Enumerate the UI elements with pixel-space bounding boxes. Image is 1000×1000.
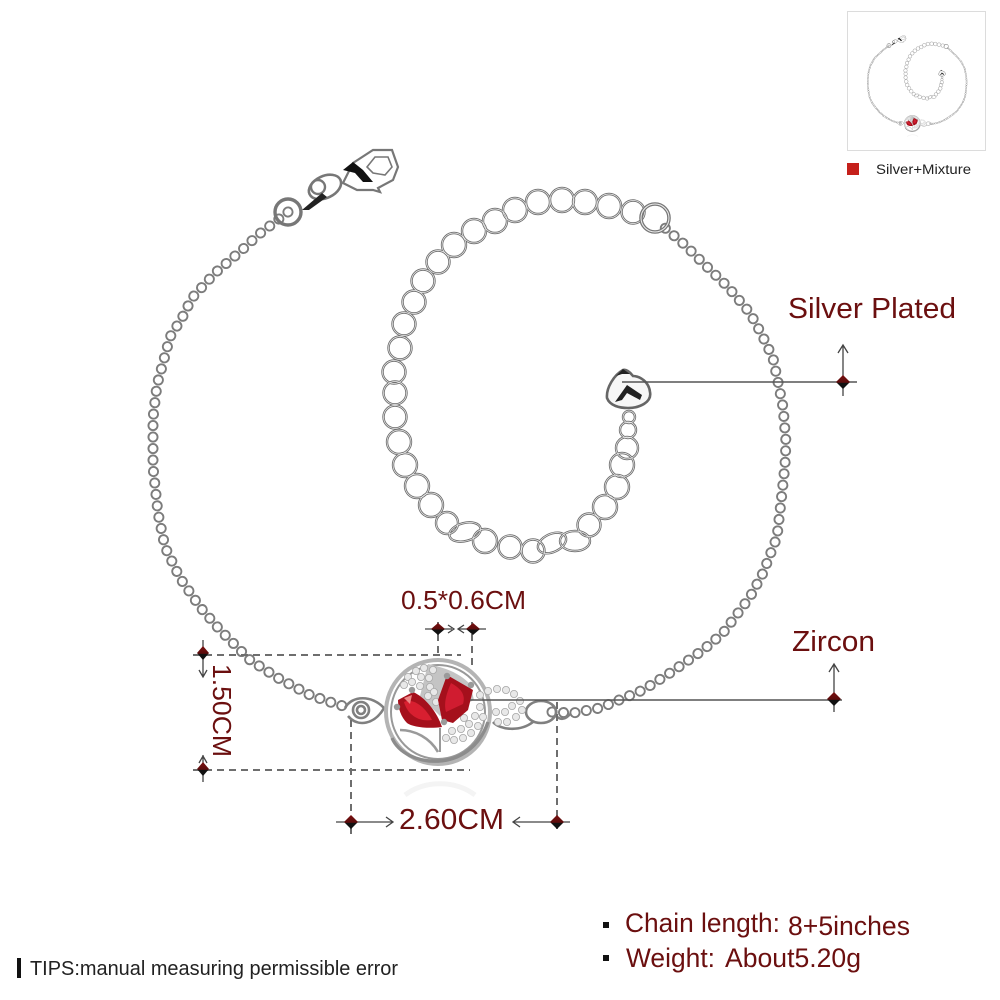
spec: chain length: 8+5inches: [788, 911, 910, 941]
callout: Zircon: [470, 626, 875, 712]
thumbnail panel: [848, 12, 986, 150]
callout: Silver Plated: Silver Plated: [788, 293, 956, 325]
dimension: 0.5*0.6CM: 0.5*0.6CM: [401, 585, 526, 615]
spec: weight: About5.20g: [725, 943, 861, 973]
spec: chain length: [603, 908, 910, 941]
spec: weight: [603, 943, 861, 973]
thumbnail: anklet: [868, 36, 967, 137]
dimension: 2.60CM: [336, 702, 570, 836]
dimension: 1.50CM: [193, 640, 470, 782]
spec: weight: Weight:: [626, 943, 715, 973]
dimension: 2.60CM: 2.60CM: [399, 804, 504, 836]
legend: Silver+Mixture: Silver+Mixture: [876, 162, 971, 178]
dimension: 0.5*0.6CM: [401, 585, 526, 668]
anklet photo: [153, 150, 786, 795]
dimension: 1.50CM: 1.50CM: [207, 664, 237, 757]
spec: chain length: Chain length:: [625, 908, 780, 938]
callout: Silver Plated: [622, 293, 956, 396]
tips note: TIPS:manual measuring permissible error: [30, 958, 398, 980]
callout: Zircon: Zircon: [792, 626, 875, 658]
